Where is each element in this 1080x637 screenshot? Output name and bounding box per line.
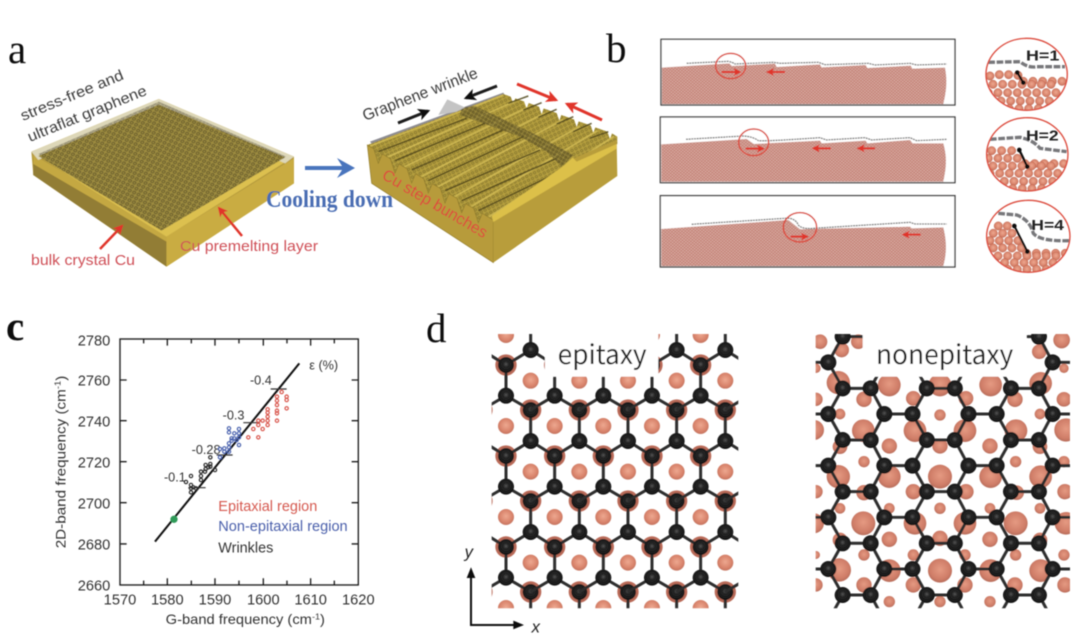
inset H=2: H=2: [1026, 129, 1059, 145]
green reference point: [170, 516, 178, 523]
x-axis tick labels: 1620: [342, 592, 375, 608]
y-axis tick labels: 2720: [78, 456, 110, 472]
label: stress-free and ultraflat graphene: ultraflat graphene: [25, 82, 149, 146]
strain value labels: [164, 358, 338, 485]
label with arrow: Cu premelting layer: Cu premelting layer: [180, 238, 318, 255]
strain fit line: [155, 363, 299, 542]
simulation frame H=1: [661, 39, 955, 105]
label: stress-free and ultraflat graphene: [18, 67, 149, 146]
y-axis title: 2D-band frequency (cm: [52, 402, 68, 548]
y-axis tick labels: 2680: [78, 537, 110, 553]
x-axis tick labels: 1610: [294, 592, 327, 608]
xy axes: [464, 542, 541, 637]
label with arrow: Cu premelting layer: [180, 208, 318, 255]
strain value labels: -0.3: [223, 408, 244, 422]
y-axis title: ): [52, 376, 68, 381]
arrow: cooling direction: [305, 158, 355, 178]
chart frame and ticks: [120, 339, 358, 585]
panel letter b: b: [606, 25, 626, 71]
label: Graphene wrinkle: Graphene wrinkle: [360, 65, 480, 125]
inset H=1: H=1: [1026, 49, 1059, 65]
panel c: Raman scatter chart: [6, 303, 375, 627]
y-axis tick labels: 2700: [78, 497, 110, 513]
panel b: simulation of step bunching: [606, 25, 1080, 273]
red compression arrows: [517, 84, 602, 120]
xy axes: y: [464, 542, 475, 561]
legend: Non-epitaxial region: [218, 519, 348, 535]
legend: [218, 499, 348, 556]
simulation frame H=4: [660, 196, 955, 267]
data points (red epitaxial, blue non-epitaxial, black wrinkles): [184, 390, 288, 494]
strain value labels: -0.4: [250, 374, 272, 388]
lattice: nonepitaxy: [814, 333, 1071, 610]
strain value labels: -0.28: [192, 443, 221, 457]
x-axis tick labels: 1570: [104, 592, 136, 608]
lattice: epitaxy: [490, 333, 740, 629]
inset H=1: [984, 36, 1069, 112]
inset H=4: [984, 200, 1080, 273]
strain tick bars: [188, 389, 287, 488]
y-axis title: -1: [53, 381, 63, 389]
label: Cu step bunches: Cu step bunches: [379, 167, 490, 242]
strain value labels: ε (%): [309, 358, 338, 372]
x-axis tick labels: [104, 592, 375, 608]
simulation frame H=2: [660, 117, 955, 183]
x-axis tick labels: 1590: [199, 592, 231, 608]
y-axis tick labels: [78, 334, 110, 595]
xy axes: x: [531, 618, 541, 637]
x-axis tick labels: 1600: [247, 592, 280, 608]
y-axis tick labels: 2780: [78, 334, 110, 350]
panel letter c: c: [6, 303, 24, 349]
label with arrow: bulk crystal Cu: [31, 226, 135, 269]
strain value labels: -0.1: [164, 471, 186, 485]
legend: Wrinkles: [218, 540, 273, 556]
right copper block with step bunches and wrinkle: [367, 93, 617, 263]
panel a: cooling-induced wrinkle formation: [8, 26, 617, 269]
panel letter d: d: [426, 305, 446, 351]
legend: Epitaxial region: [218, 499, 317, 515]
x-axis title: G-band frequency (cm: [166, 611, 305, 627]
y-axis tick labels: 2740: [78, 415, 110, 431]
x-axis title: ): [320, 611, 325, 627]
y-axis tick labels: 2760: [78, 374, 110, 390]
label with arrow: bulk crystal Cu: bulk crystal Cu: [31, 252, 135, 269]
black compression arrows: [398, 86, 497, 123]
label: stress-free and ultraflat graphene: stress-free and: [18, 67, 126, 125]
label: Cooling down: Cooling down: [266, 187, 393, 213]
inset H=4: H=4: [1031, 218, 1065, 234]
y-axis tick labels: 2660: [78, 579, 110, 595]
lattice: epitaxy: epitaxy: [558, 333, 647, 372]
panel d: atomic lattice models: [426, 312, 1071, 634]
lattice: nonepitaxy: nonepitaxy: [876, 333, 1013, 372]
inset H=2: [985, 116, 1070, 192]
panel letter a: a: [8, 26, 26, 72]
x-axis title: -1: [312, 611, 320, 621]
left copper block with flat graphene: [31, 99, 294, 267]
x-axis tick labels: 1580: [151, 592, 184, 608]
